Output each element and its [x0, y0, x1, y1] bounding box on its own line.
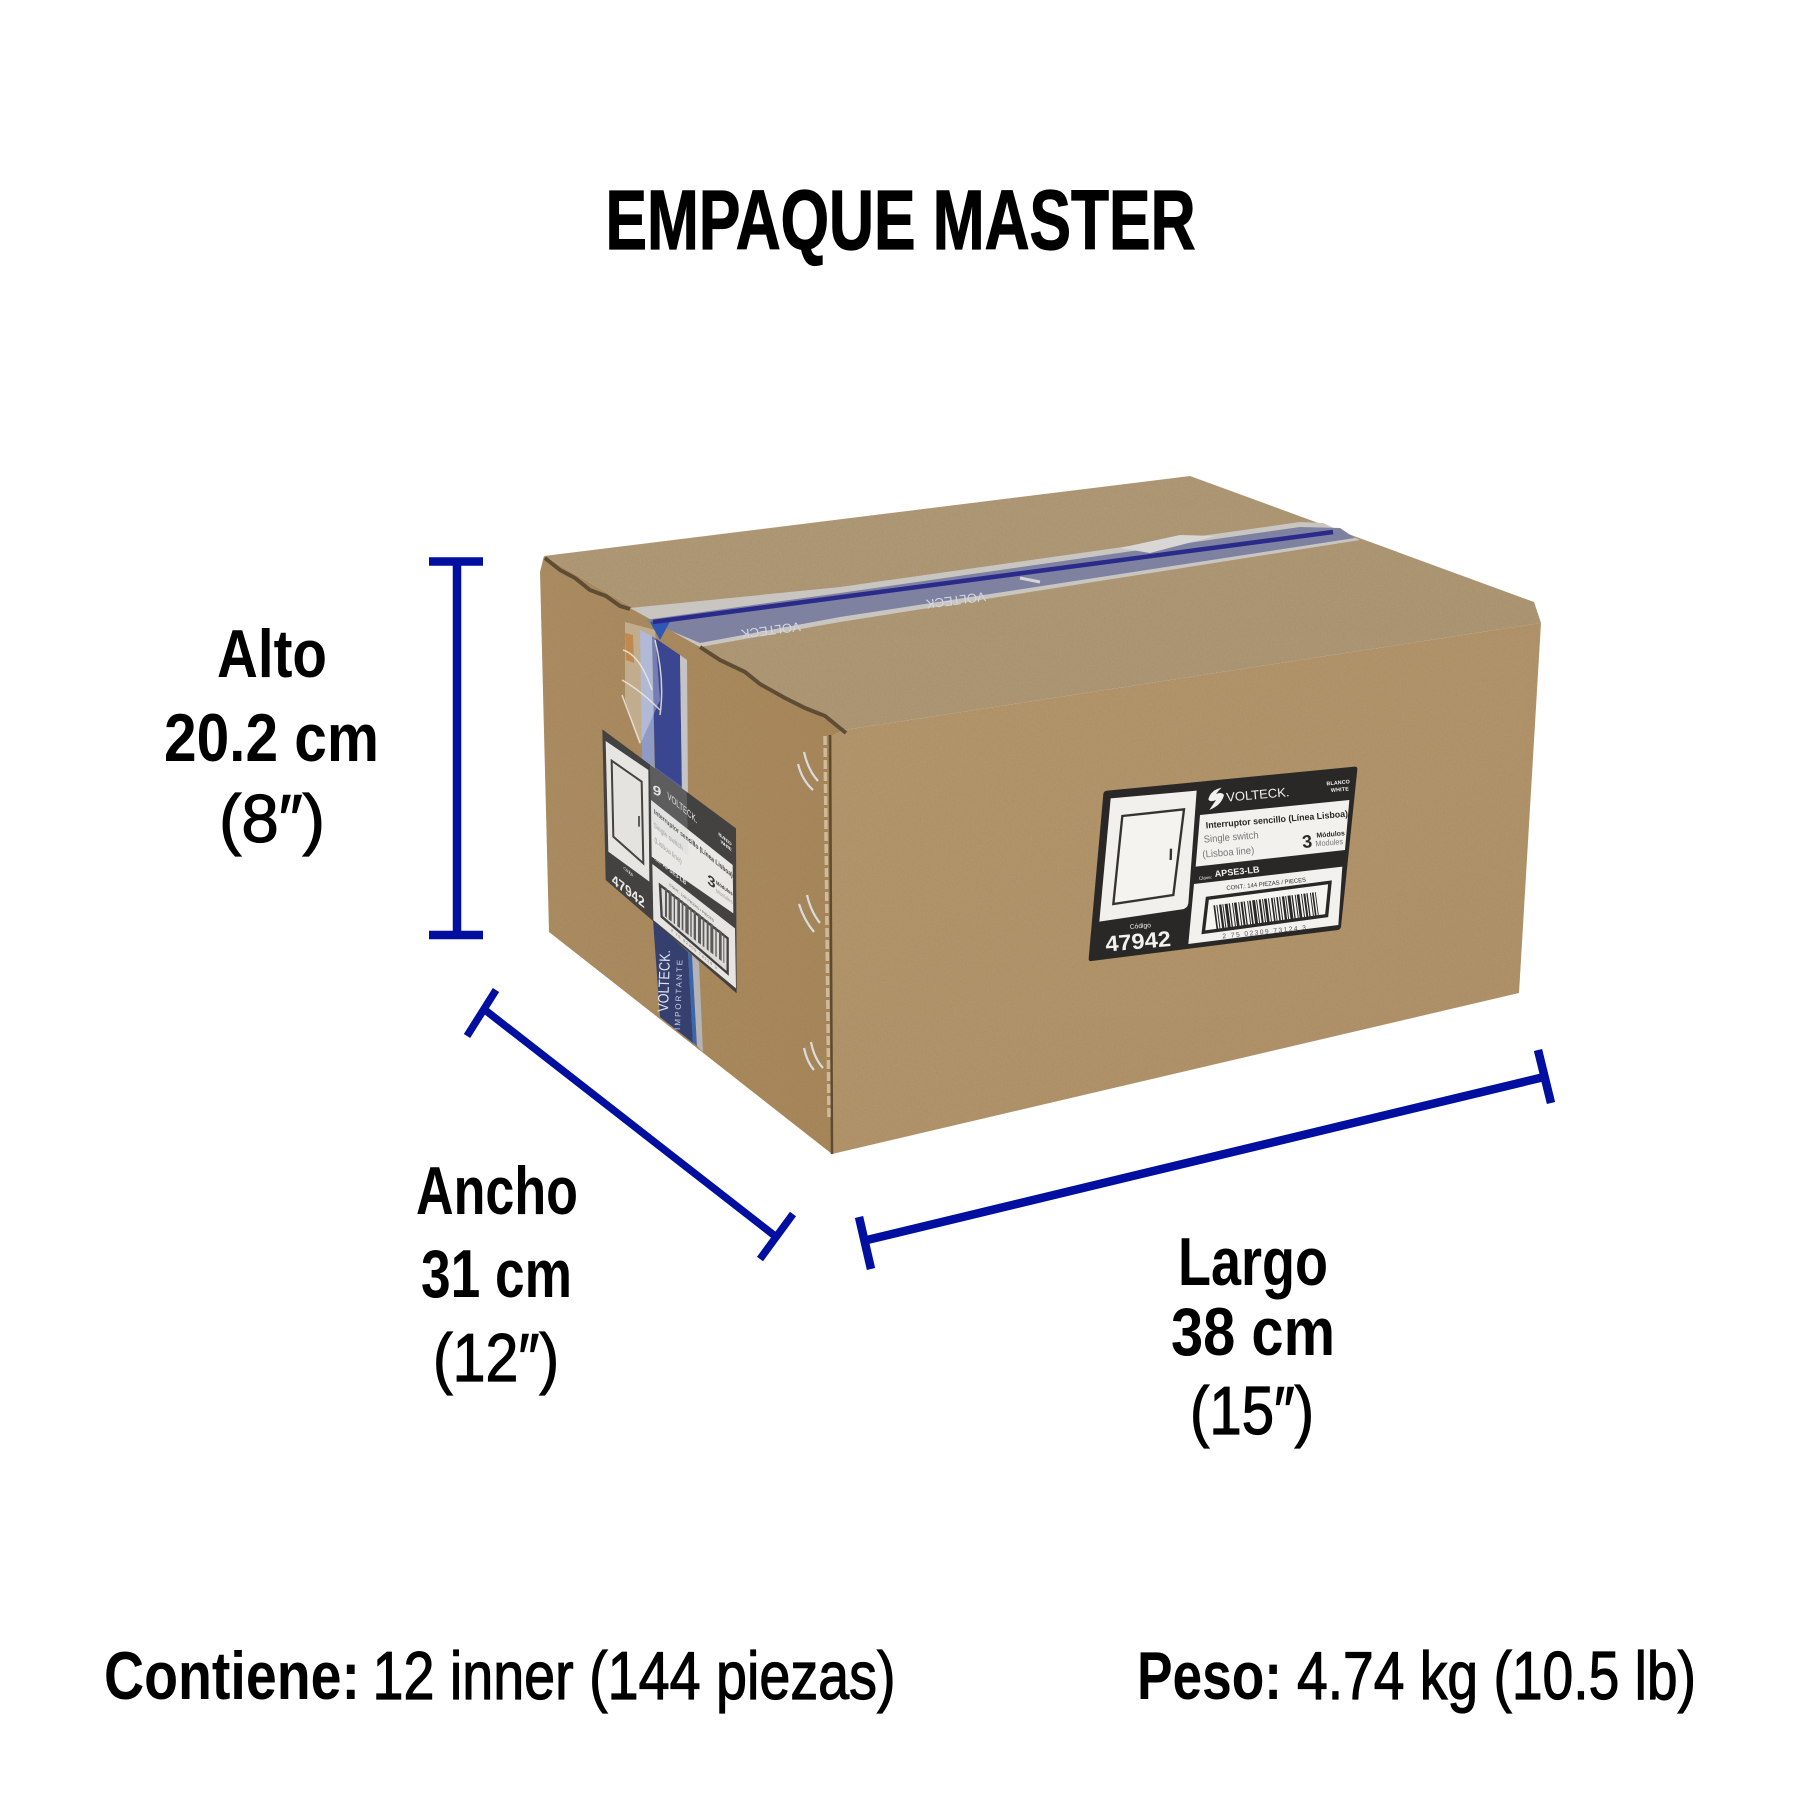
top tape: VOLTECK [925, 589, 987, 612]
label text: WHITE [1331, 786, 1350, 794]
box left face [540, 556, 844, 1154]
product image panel [1099, 791, 1197, 922]
contents text: Contiene: [104, 1638, 360, 1714]
barcode panel [1188, 867, 1342, 944]
side text panel [651, 800, 733, 913]
side label text: (Lisboa line) [654, 835, 682, 866]
side label text: APSE3-LB [663, 860, 686, 887]
side label [602, 729, 737, 993]
label: alto: 20.2 cm [164, 700, 379, 776]
label text: CONT.: 144 PIEZAS / PIECES [1226, 878, 1306, 892]
side tape upper part [622, 622, 688, 800]
side tape lower part: VOLTECK. [655, 950, 674, 1012]
side label text: Modules [716, 888, 733, 906]
label: ancho [416, 1153, 578, 1396]
side tape lower part: IMPORTANTE [673, 960, 684, 1030]
label: largo: (15″) [1190, 1373, 1314, 1449]
label text: APSE3-LB [1214, 864, 1260, 879]
label: largo: Largo [1178, 1224, 1328, 1300]
weight text: 4.74 kg (10.5 lb) [1297, 1638, 1696, 1714]
label text: 3 [1301, 831, 1313, 852]
side label text: Single switch [653, 820, 683, 853]
label text: BLANCO [1326, 779, 1350, 787]
side barcode panel [652, 864, 736, 988]
cardboard texture [542, 558, 1296, 664]
label: alto: Alto [217, 616, 327, 692]
label text: Código [1130, 922, 1151, 931]
weight text [1137, 1638, 1696, 1714]
label: ancho: Ancho [416, 1153, 578, 1229]
contents text [104, 1638, 896, 1714]
label: alto [164, 616, 379, 857]
side label text: 47942 [612, 870, 645, 912]
box front face [832, 623, 1541, 1154]
label text: Módulos [1316, 830, 1345, 840]
label text: 47942 [1104, 926, 1172, 957]
label: ancho: 31 cm [421, 1236, 572, 1312]
side label text: BLANCO [718, 832, 732, 848]
contents text: 12 inner (144 piezas) [372, 1638, 896, 1714]
side label text: 9 [653, 782, 662, 800]
label text: Modules [1315, 837, 1343, 848]
corner seam [825, 735, 832, 1154]
label: alto: (8″) [219, 781, 325, 857]
clear tape over side label [650, 763, 688, 857]
side label text: Interruptor sencillo (Línea Lisboa) [654, 807, 733, 880]
side label text: Módulos [716, 880, 733, 898]
side label text: CONT.: 144 PIEZAS / PIECES [669, 882, 714, 923]
torn flap edge [545, 558, 846, 733]
label text: Interruptor sencillo (Línea Lisboa) [1205, 809, 1348, 830]
label text: VOLTECK. [1226, 785, 1290, 805]
dimension line: largo [859, 1050, 1551, 1269]
product text panel [1196, 800, 1349, 867]
side label text [612, 782, 733, 971]
side label text: 2 75 02309 73124 3 [671, 928, 717, 971]
title: EMPAQUE MASTER [606, 173, 1196, 267]
dimension line: alto [429, 561, 483, 935]
label text [1104, 779, 1350, 957]
dimension line: ancho [467, 990, 793, 1259]
label text: Single switch [1203, 830, 1259, 846]
label text: Clave: [1199, 875, 1212, 881]
top tape: VOLTECK [740, 619, 802, 642]
side product image [606, 741, 649, 882]
label: largo [1171, 1224, 1335, 1449]
staples [798, 752, 823, 1070]
top tape [630, 522, 1360, 647]
label text: 2 75 02309 73124 3 [1222, 925, 1307, 940]
side label text: 3 [707, 872, 716, 893]
side tape lower part [653, 920, 703, 1052]
weight text: Peso: [1137, 1638, 1282, 1714]
label: largo: 38 cm [1171, 1294, 1335, 1370]
front label [1089, 767, 1357, 961]
side label text: Clave: [654, 857, 661, 866]
side label text: Código [623, 865, 634, 879]
label text: (Lisboa line) [1202, 845, 1255, 861]
side label text: VOLTECK. [667, 790, 697, 826]
side label text: WHITE [721, 839, 732, 854]
cardboard box [530, 470, 1550, 1160]
box top face [544, 476, 1541, 730]
label: ancho: (12″) [433, 1320, 559, 1396]
